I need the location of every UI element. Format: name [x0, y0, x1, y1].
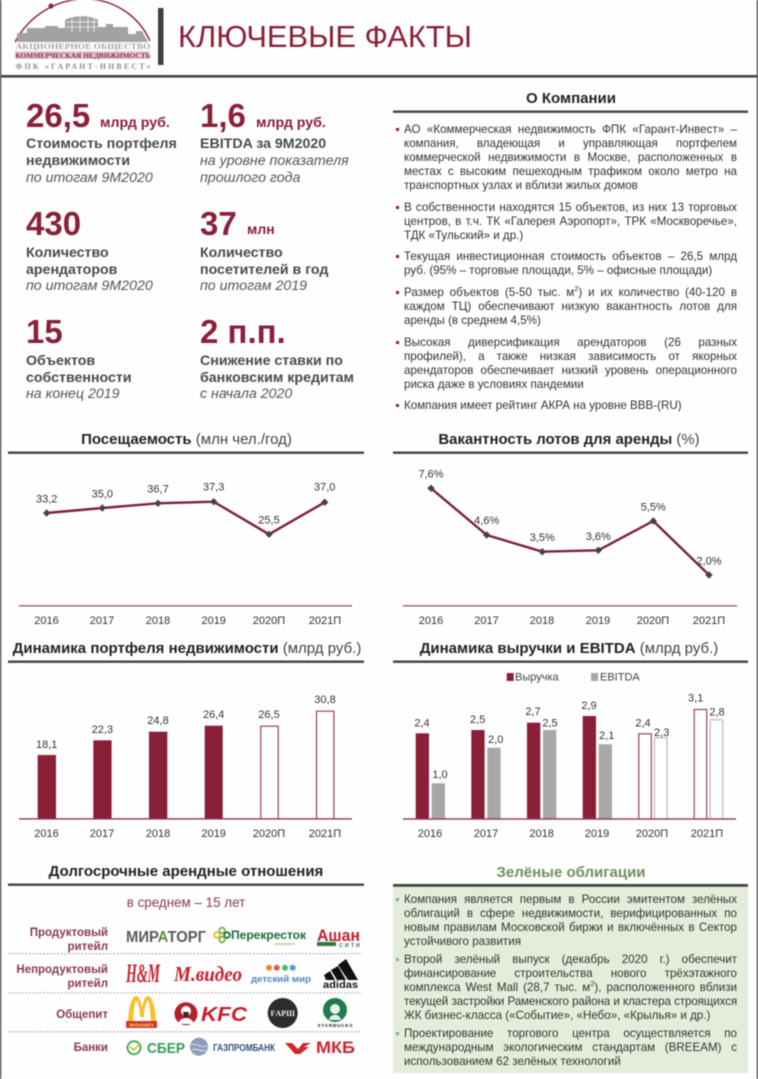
logo: McDonald's: McDonald's	[130, 1022, 154, 1028]
tenant category labels: ритейл	[68, 941, 108, 953]
key figure: visitors	[200, 205, 328, 294]
bar chart: portfolio: 2017	[90, 828, 114, 840]
logo: Perekrestok	[214, 928, 307, 946]
line chart: vacancy: 2016	[419, 615, 443, 627]
bar chart: revenue and EBITDA: 2019	[585, 828, 609, 840]
logo: H&M: H&M	[125, 959, 160, 988]
bar chart: portfolio: 22,3	[92, 724, 113, 736]
logo: M.Video: М.видео	[173, 962, 242, 986]
bar chart: portfolio: 2019	[201, 828, 226, 840]
bar chart: portfolio: 26,5	[258, 709, 280, 721]
key figure: visitors: посетителей в год	[200, 262, 328, 278]
tenant category labels: Непродуктовый	[16, 964, 108, 976]
key figure: visitors: Количество	[200, 245, 283, 261]
line chart: vacancy: 2018	[530, 615, 554, 627]
text block: green bonds bullets: текущей застройки Раменского района и кластера строящихся	[404, 995, 737, 1008]
key figure: tenants: 430	[26, 205, 81, 242]
bar chart: portfolio: 30,8	[314, 694, 336, 706]
heading: green bonds: Зелёные облигации	[496, 864, 646, 881]
line chart: vacancy: 2,0%	[696, 555, 722, 567]
logo: Starbucks: STARBUCKS	[318, 1023, 352, 1028]
line chart: vacancy: 2020П	[637, 615, 669, 627]
bar chart: revenue and EBITDA: 2021П	[691, 828, 723, 840]
bar chart: portfolio: 2020П	[253, 828, 285, 840]
logo: Detsky Mir: детский мир	[251, 974, 311, 985]
bar chart: revenue and EBITDA: 2,5	[470, 714, 485, 726]
logo: adidas	[323, 959, 358, 991]
text block: about company bullets	[395, 123, 738, 412]
bar chart: revenue and EBITDA: 2,7	[525, 706, 541, 718]
logo: Auchan: Ашан	[317, 926, 360, 945]
tenant category labels	[16, 927, 108, 1054]
tenant category labels: Банки	[74, 1042, 108, 1054]
line chart: vacancy: 4,6%	[474, 515, 499, 527]
company logo: АКЦИОНЕРНОЕ ОБЩЕСТВО	[16, 42, 150, 51]
bar chart: revenue and EBITDA: 2,8	[709, 707, 725, 719]
line chart: attendance: 2016	[34, 615, 59, 627]
text block: about company bullets: руб. (95% – торговые площади, 5% – офисные площади)	[404, 264, 712, 277]
logo: McDonald's	[126, 996, 157, 1028]
text block: about company bullets: Текущая инвестиционная стоимость объектов – 26,5 млрд	[404, 250, 737, 263]
logo: Starbucks	[318, 998, 352, 1028]
logo: Farsh	[268, 998, 298, 1028]
text block: about company bullets: каждом ТЦ) обеспечивают низкую вакантность лотов для	[404, 300, 737, 313]
heading: attendance: Посещаемость (млн чел./год)	[81, 431, 292, 448]
bar chart: revenue and EBITDA: 2,4	[414, 718, 430, 730]
average lease term: в среднем – 15 лет	[127, 895, 245, 910]
line chart: attendance	[19, 482, 352, 627]
legend: EBITDA	[600, 672, 640, 684]
logo: KFC	[174, 1002, 248, 1026]
key figure: properties: собственности	[26, 370, 132, 386]
bar chart: revenue and EBITDA: 1,0	[432, 769, 448, 781]
text block: about company bullets: АО «Коммерческая недвижимость ФПК «Гарант-Инвест» –	[404, 123, 737, 136]
text block: green bonds bullets: финансирование строительства нового трёхэтажного	[404, 967, 737, 980]
key figure: properties	[26, 313, 132, 402]
key figure: portfolio value: по итогам 9М2020	[26, 170, 153, 186]
tenant category labels: ритейл	[68, 978, 108, 990]
text block: green bonds bullets: облигаций в сфере недвижимости, верифицированных по	[404, 907, 737, 920]
logo: MKB	[285, 1038, 355, 1057]
text block: about company bullets: арендаторов обеспечивает низкий уровень операционного	[404, 364, 737, 377]
text block: green bonds bullets: новым правилам Московской биржи и включённых в Сектор	[404, 921, 737, 934]
company logo: ФПК «ГАРАНТ-ИНВЕСТ»	[16, 62, 150, 71]
heading: about company: О Компании	[526, 90, 616, 107]
tenant category labels: Продуктовый	[30, 927, 108, 939]
key figure: tenants	[26, 205, 153, 294]
logo: KFC: KFC	[201, 1004, 248, 1026]
line chart: attendance: 25,5	[258, 514, 280, 526]
key figure: rate reduction: 2 п.п.	[200, 313, 286, 350]
legend	[507, 672, 640, 684]
text block: green bonds bullets: использованием 62 зелёных технологий	[404, 1055, 621, 1068]
company logo	[15, 0, 151, 71]
line chart: vacancy	[403, 469, 737, 627]
logo: Sber	[128, 1040, 185, 1057]
key figure: portfolio value: млрд руб.	[100, 115, 170, 131]
text block: green bonds bullets: устойчивого развития	[404, 935, 521, 948]
text block: green bonds bullets: Проектирование торгового центра осуществляется по	[404, 1026, 737, 1040]
key figure: tenants: Количество	[26, 245, 109, 261]
line chart: vacancy: 2019	[586, 615, 610, 627]
line chart: attendance: 37,0	[314, 482, 335, 494]
bar chart: revenue and EBITDA: 2017	[474, 828, 498, 840]
text block: green bonds bullets: Второй зелёный выпуск (декабрь 2020 г.) обеспечит	[404, 953, 737, 966]
heading: revenue and EBITDA: Динамика выручки и EBITDA (млрд руб.)	[420, 640, 718, 657]
key figure: rate reduction: с начала 2020	[200, 386, 292, 402]
line chart: vacancy: 2017	[474, 615, 499, 627]
key figure: tenants: по итогам 9М2020	[26, 278, 153, 294]
line chart: attendance: 36,7	[147, 484, 169, 496]
company logo: КОММЕРЧЕСКАЯ НЕДВИЖИМОСТЬ	[16, 51, 151, 60]
text block: about company bullets: Размер объектов (5-50 тыс. м2) и их количество (40-120 в	[404, 284, 737, 299]
key figure: portfolio value: недвижимости	[26, 153, 130, 169]
line chart: attendance: 33,2	[36, 494, 57, 506]
line chart: attendance: 2020П	[253, 615, 285, 627]
bar chart: portfolio: 2016	[34, 828, 59, 840]
text block: green bonds bullets: Компания является первым в России эмитентом зелёных	[404, 893, 737, 906]
line chart: attendance: 2021П	[309, 615, 341, 627]
key figure: visitors: 37	[200, 205, 237, 242]
key figure: EBITDA: на уровне показателя	[200, 153, 349, 169]
text block: about company bullets: аренды (в среднем 4,5%)	[404, 314, 541, 327]
key figure: properties: 15	[26, 313, 63, 350]
key figure: properties: Объектов	[26, 353, 95, 369]
text block: about company bullets: ТДК «Тульский» и др.)	[404, 229, 523, 242]
title: КЛЮЧЕВЫЕ ФАКТЫ	[178, 20, 472, 54]
key figure: rate reduction: банковским кредитам	[200, 370, 354, 386]
text block: green bonds bullets: международным экологическим стандартам (BREEAM) с	[404, 1041, 737, 1054]
bar chart: portfolio: 2021П	[309, 828, 341, 840]
logo: Gazprombank: ГАЗПРОМБАНК	[213, 1042, 275, 1054]
green bonds panel background	[393, 887, 748, 1073]
bar chart: revenue and EBITDA: 2,5	[542, 718, 558, 730]
key figure: visitors: млн	[247, 221, 275, 237]
bar chart: portfolio: 24,8	[147, 715, 169, 727]
bar chart: portfolio: 2018	[146, 828, 170, 840]
text block: green bonds bullets	[396, 893, 738, 1068]
logo: Auchan: СИТИ	[339, 943, 360, 949]
logo: Miratorg: МИРАТОРГ	[126, 929, 206, 946]
key figure: rate reduction: Снижение ставки по	[200, 353, 343, 369]
logo: Perekrestok: Перекресток	[231, 928, 307, 942]
bar chart: revenue and EBITDA: 2018	[529, 828, 554, 840]
key figure: portfolio value	[26, 97, 177, 186]
bar chart: portfolio	[19, 694, 352, 840]
bar chart: revenue and EBITDA: 2,3	[654, 727, 669, 739]
key figure: rate reduction	[200, 313, 354, 402]
line chart: vacancy: 2021П	[693, 615, 725, 627]
line chart: vacancy: 3,5%	[530, 532, 555, 544]
key figure: portfolio value: 26,5	[26, 97, 90, 134]
line chart: attendance: 35,0	[92, 488, 113, 500]
text block: about company bullets: компания, владеющая и управляющая портфелем	[404, 137, 737, 150]
line chart: attendance: 37,3	[203, 482, 224, 494]
text block: about company bullets: местах с высоким пешеходным трафиком около метро на	[404, 165, 737, 178]
heading: portfolio dynamics: Динамика портфеля недвижимости (млрд руб.)	[13, 640, 361, 657]
text block: about company bullets: Высокая диверсификация арендаторов (26 разных	[404, 336, 737, 349]
logo: Farsh: FАРШ	[271, 1009, 295, 1018]
tenant category labels: Общепит	[56, 1009, 108, 1021]
text block: about company bullets: коммерческой недвижимости в Москве, расположенных в	[404, 151, 737, 164]
line chart: attendance: 2019	[201, 615, 226, 627]
bar chart: portfolio: 18,1	[36, 739, 57, 751]
key figure: EBITDA	[200, 97, 349, 186]
bar chart: revenue and EBITDA: 2,1	[599, 730, 614, 742]
logo: adidas: adidas	[323, 980, 358, 991]
logo: MKB: МКБ	[316, 1038, 355, 1057]
text block: about company bullets: профилей), а также низкая зависимость от якорных	[404, 350, 737, 363]
line chart: attendance: 2017	[90, 615, 114, 627]
bar chart: revenue and EBITDA: 2016	[418, 828, 442, 840]
bar chart: portfolio: 26,4	[203, 709, 224, 721]
key figure: EBITDA: EBITDA за 9М2020	[200, 136, 326, 152]
text block: green bonds bullets: комплекса West Mall (28,7 тыс. м2), расположенного вблизи	[404, 979, 737, 994]
key figure: EBITDA: прошлого года	[200, 170, 300, 186]
text block: about company bullets: транспортных узлах и вблизи жилых домов	[404, 179, 638, 192]
bar chart: revenue and EBITDA: 2020П	[636, 828, 668, 840]
logo: Perekrestok: супермаркет	[274, 941, 295, 946]
bar chart: revenue and EBITDA: 2,4	[635, 718, 651, 730]
key figure: portfolio value: Стоимость портфеля	[26, 136, 177, 152]
bar chart: revenue and EBITDA: 3,1	[688, 693, 703, 705]
line chart: vacancy: 5,5%	[641, 502, 666, 514]
heading: long-term leases: Долгосрочные арендные отношения	[49, 863, 323, 880]
text block: about company bullets: риска даже в условиях пандемии	[404, 378, 584, 391]
bar chart: revenue and EBITDA: 2,9	[581, 700, 597, 712]
key figure: visitors: по итогам 2019	[200, 278, 307, 294]
logo: Sber: СБЕР	[147, 1040, 185, 1057]
bar chart: revenue and EBITDA: 2,0	[488, 734, 503, 746]
legend: Выручка	[515, 672, 560, 684]
text block: green bonds bullets: ЖК бизнес-класса («Событие», «Небо», «Крылья» и др.)	[404, 1009, 710, 1022]
key figure: properties: на конец 2019	[26, 386, 120, 402]
text block: about company bullets: Компания имеет рейтинг АКРА на уровне BBB-(RU)	[404, 399, 682, 412]
line chart: vacancy: 3,6%	[586, 531, 611, 543]
text block: about company bullets: В собственности находятся 15 объектов, из них 13 торговых	[404, 201, 737, 214]
key figure: EBITDA: 1,6	[200, 97, 246, 134]
key figure: EBITDA: млрд руб.	[256, 115, 326, 131]
line chart: vacancy: 7,6%	[418, 469, 444, 481]
bar chart: revenue and EBITDA	[403, 693, 736, 840]
text block: about company bullets: центров, в т.ч. ТК «Галерея Аэропорт», ТРК «Москворечье»,	[404, 215, 737, 228]
key figure: tenants: арендаторов	[26, 262, 118, 278]
logo: Gazprombank	[190, 1038, 275, 1056]
line chart: attendance: 2018	[146, 615, 170, 627]
heading: vacancy: Вакантность лотов для аренды (%)	[438, 432, 700, 448]
logo: Detsky Mir	[251, 965, 311, 985]
